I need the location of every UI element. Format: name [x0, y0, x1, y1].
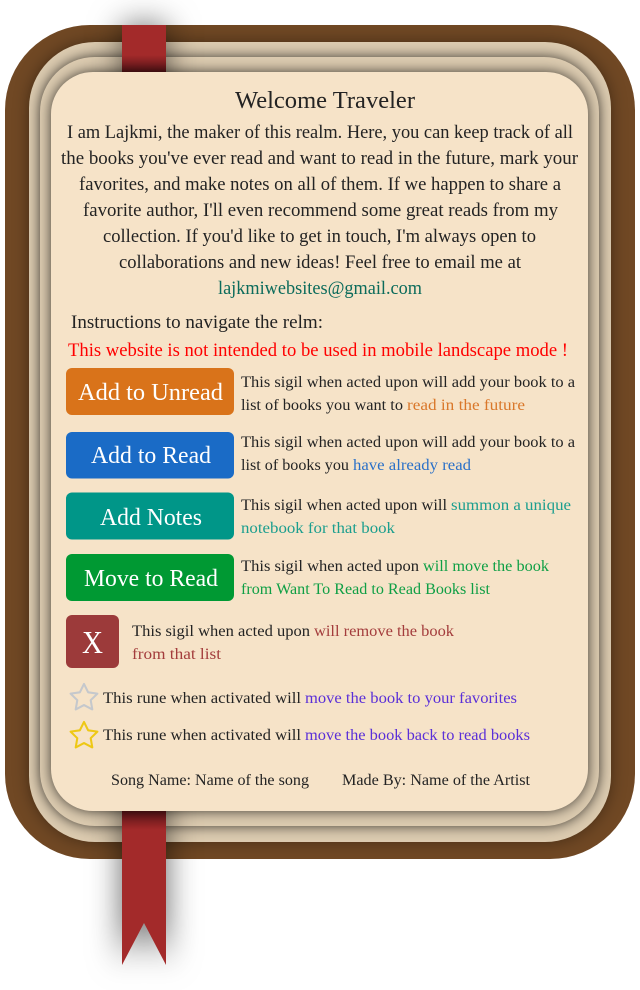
button: add to read: [66, 432, 234, 478]
description: remove: [132, 623, 454, 663]
button: add to read: Add to Read: [91, 443, 211, 469]
mobile warning: This website is not intended to be used in mobile landscape mode !: [68, 341, 568, 361]
icon: gold star: [71, 722, 97, 747]
welcome paragraph: I am Lajkmi, the maker of this realm. Here, you can keep track of all: [67, 123, 573, 143]
description: add to read: [241, 434, 575, 474]
welcome paragraph: favorites, and make notes on all of them. If we happen to share a: [79, 175, 561, 195]
description: add notes: This sigil when acted upon will: [241, 497, 447, 514]
description: move to read: [241, 558, 549, 598]
description: add to unread: read in the future: [407, 397, 525, 414]
artist name: Made By: Name of the Artist: [342, 772, 531, 789]
description: add to unread: This sigil when acted upon will add your book to a: [241, 374, 575, 391]
welcome paragraph: favorite author, I'll even recommend some great reads from my: [83, 201, 559, 221]
instructions heading: Instructions to navigate the relm:: [71, 313, 323, 333]
button: move to read: [66, 554, 234, 601]
song name: Song Name: Name of the song: [111, 772, 309, 789]
description: add to read: have already read: [353, 457, 471, 474]
description: add to unread: list of books you want to: [241, 397, 403, 414]
welcome paragraph: the books you've ever read and want to read in the future, mark your: [61, 149, 578, 169]
description: add to unread: [241, 374, 575, 414]
description: add notes: notebook for that book: [241, 520, 395, 537]
welcome paragraph: lajkmiwebsites@gmail.com: [218, 279, 423, 299]
welcome paragraph: [61, 123, 578, 299]
description: grey star: This rune when activated will: [103, 690, 301, 707]
welcome paragraph: collaborations and new ideas! Feel free to email me at: [119, 253, 522, 273]
button: add notes: Add Notes: [100, 505, 202, 531]
description: add to read: This sigil when acted upon will add your book to a: [241, 434, 575, 451]
page stack: inner page: [40, 57, 599, 826]
description: grey star: [103, 690, 517, 707]
welcome paragraph: collection. If you'd like to get in touch, I'm always open to: [103, 227, 536, 247]
ribbon bookmark: [98, 2, 190, 970]
panel: cream page: [51, 72, 588, 811]
description: remove: This sigil when acted upon: [132, 623, 310, 640]
description: gold star: This rune when activated will: [103, 727, 301, 744]
description: grey star: move the book to your favorites: [305, 690, 517, 707]
icon: grey star: [71, 684, 97, 709]
title: Welcome Traveler: [235, 88, 415, 114]
description: add notes: summon a unique: [451, 497, 571, 514]
description: add to read: list of books you: [241, 457, 349, 474]
description: move to read: This sigil when acted upon: [241, 558, 419, 575]
button: add to unread: Add to Unread: [78, 380, 223, 406]
button: remove: [66, 615, 119, 668]
button: add notes: [66, 492, 234, 540]
page stack: outer page: [29, 42, 611, 842]
description: gold star: [103, 727, 530, 744]
button: add to unread: [66, 368, 234, 415]
description: gold star: move the book back to read books: [305, 727, 530, 744]
description: move to read: will move the book: [423, 558, 549, 575]
description: move to read: from Want To Read to Read Books list: [241, 581, 491, 598]
button: move to read: Move to Read: [84, 566, 218, 592]
description: remove: from that list: [132, 646, 222, 663]
button: remove: X: [82, 624, 103, 660]
description: remove: will remove the book: [314, 623, 454, 640]
description: add notes: [241, 497, 571, 537]
